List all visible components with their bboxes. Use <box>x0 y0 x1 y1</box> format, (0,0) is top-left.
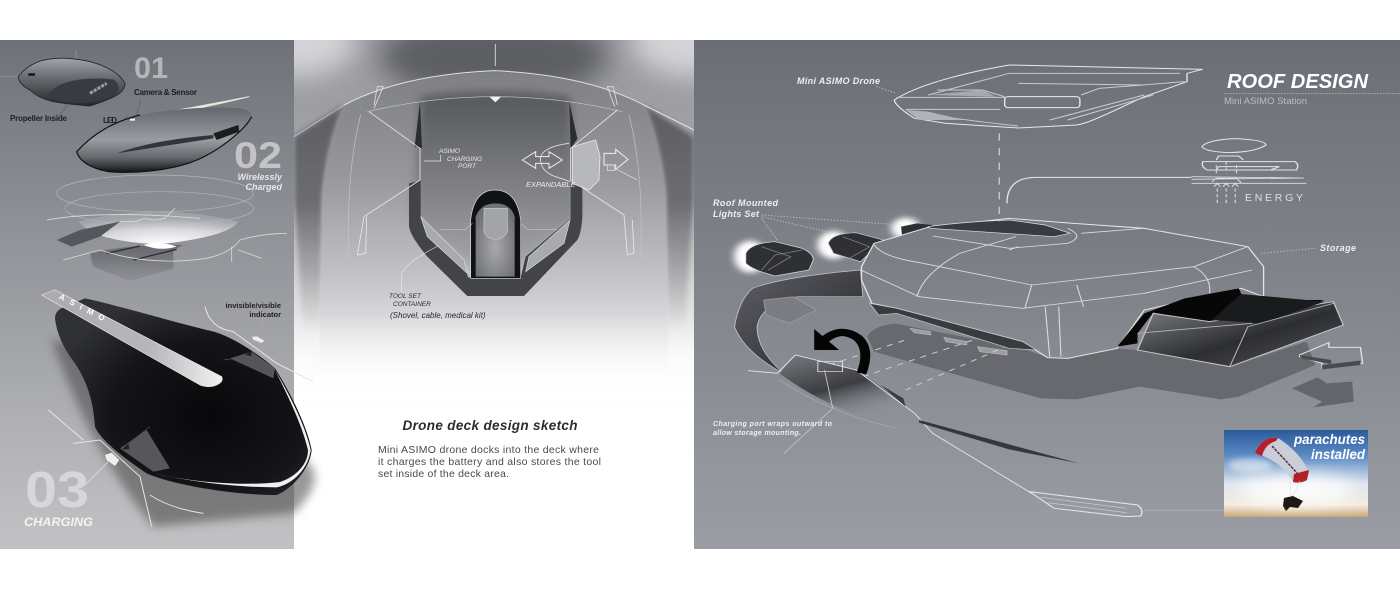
label: invisible indicator <box>226 301 281 319</box>
U-shaped channel <box>415 102 422 148</box>
handwritten note: charging port: ASIMO <box>438 148 460 155</box>
label: storage: Storage <box>1320 243 1356 253</box>
handwritten note: tool set: (Shovel, cable, medical kit) <box>390 311 486 320</box>
divider <box>1224 92 1400 94</box>
panel: drone stages background <box>0 40 294 549</box>
label: parachutes installed <box>1293 432 1366 462</box>
text block: drone deck description <box>378 444 601 480</box>
bar lettering: ASIMO <box>57 292 112 326</box>
label: charging port note: allow storage mounting. <box>713 430 801 437</box>
label: invisible indicator: indicator <box>249 310 281 319</box>
illustration: drone 01 <box>0 50 125 116</box>
label: roof lights: Roof Mounted <box>713 198 778 208</box>
label: mini drone: Mini ASIMO Drone <box>797 76 880 86</box>
heading: drone deck: Drone deck design sketch <box>402 418 578 433</box>
handwritten note: tool set <box>389 293 486 320</box>
label: roof lights: Lights Set <box>713 209 760 219</box>
subtitle: Mini ASIMO Station <box>1224 96 1307 107</box>
rotation arrow <box>822 332 865 373</box>
handwritten note: tool set: CONTAINER <box>393 301 431 308</box>
illustration: wireless charging <box>47 175 287 280</box>
label: charging port note <box>713 421 833 437</box>
expansion arrows <box>522 152 562 168</box>
label: energy: ENERGY <box>1245 192 1303 204</box>
filled arrow <box>1292 377 1354 407</box>
icon: indicator <box>252 317 273 343</box>
label: roof lights <box>713 198 778 219</box>
text block: drone deck description: it charges the battery and also stores the tool <box>378 456 601 468</box>
station body <box>861 218 1264 358</box>
label: invisible indicator: invisible/visible <box>226 301 281 310</box>
energy diagram <box>1202 139 1298 170</box>
label: wirelessly charged: Charged <box>245 182 282 192</box>
charging port <box>471 190 521 278</box>
sketch lines <box>357 112 420 255</box>
panel: drone deck sketch <box>294 40 694 358</box>
label: parachutes installed: installed <box>1311 447 1366 462</box>
text block: drone deck description: Mini ASIMO drone docks into the deck where <box>378 444 599 456</box>
label: parachutes installed: parachutes <box>1293 432 1365 447</box>
panel: roof design background <box>694 40 1400 549</box>
lights <box>734 218 933 276</box>
handwritten note: tool set: TOOL SET <box>389 293 422 300</box>
label: 01: 01 <box>134 52 168 85</box>
handwritten note: charging port <box>438 148 482 170</box>
label: charging port note: Charging port wraps outward to <box>713 421 833 428</box>
charging port flap <box>780 355 910 423</box>
leader lines <box>762 87 1315 253</box>
strap <box>735 270 863 372</box>
car flanks <box>294 105 344 340</box>
centre marker <box>489 97 501 102</box>
drone sketch <box>894 65 1203 128</box>
drawer <box>1117 288 1324 347</box>
rear vent <box>870 303 1036 350</box>
title: roof design: ROOF DESIGN <box>1227 71 1369 93</box>
label: camera and sensor: Camera & Sensor <box>134 88 197 97</box>
photo: parachute <box>1224 430 1368 517</box>
label: propeller inside: Propeller Inside <box>10 114 68 123</box>
label: 02: 02 <box>234 135 282 176</box>
outline arrow <box>1300 343 1363 368</box>
vent bar <box>1029 492 1142 517</box>
label: 03: 03 <box>25 461 89 518</box>
label: wirelessly charged <box>238 172 283 192</box>
hood <box>322 70 666 335</box>
illustration: drone 02 <box>77 96 252 172</box>
dashed link <box>998 133 1001 222</box>
label: wirelessly charged: Wirelessly <box>238 172 283 182</box>
label: charging: CHARGING <box>24 517 93 529</box>
label: LED: LED <box>103 116 117 125</box>
text block: drone deck description: set inside of the deck area. <box>378 468 509 480</box>
handwritten note: expandable: EXPANDABLE <box>526 180 576 189</box>
illustration: charging drone 03 <box>42 290 315 527</box>
station shadow <box>867 323 1315 399</box>
roof design illustration <box>734 65 1363 517</box>
icon: battery <box>105 453 119 466</box>
handwritten note: charging port: PORT <box>458 163 477 170</box>
handwritten note: charging port: CHARGING <box>447 156 482 163</box>
